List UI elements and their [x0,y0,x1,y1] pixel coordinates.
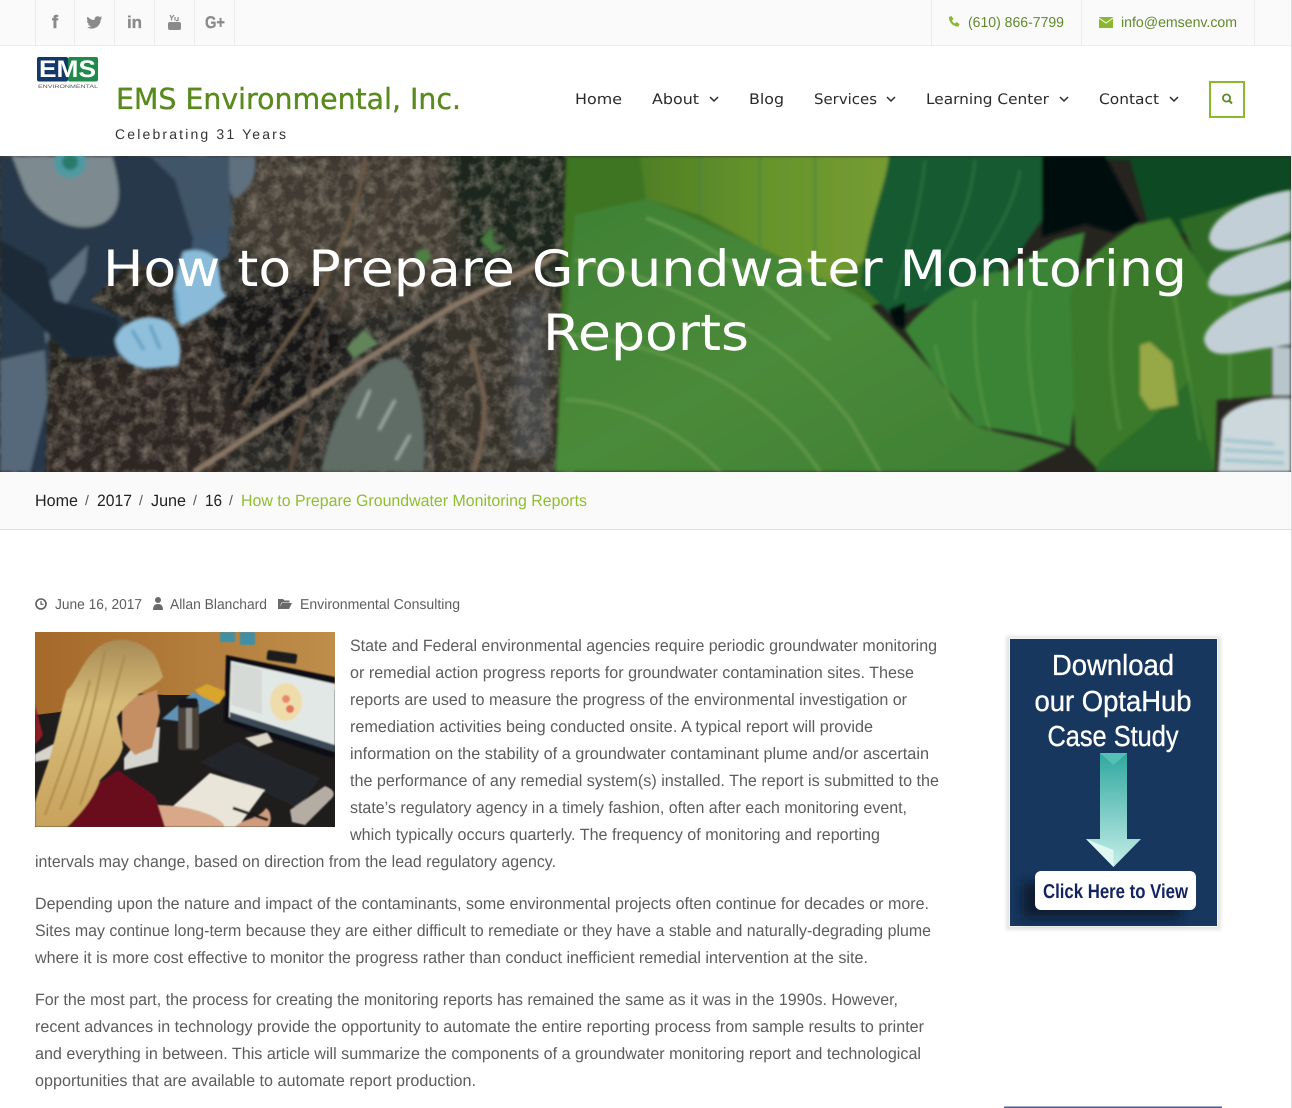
post meta: June 16, 2017 [55,597,142,613]
navigation: About [652,92,699,108]
coffee tumbler [178,702,199,750]
navigation: Services [814,92,877,108]
breadcrumb bar: 2017 [97,492,132,510]
icon: author [153,597,163,610]
article paragraph 2: Sites may continue long-term because they are either difficult to remediate or they have a stable and naturally-degrading plume [35,922,931,940]
logo: ENVIRONMENTAL [38,84,98,90]
arrow: down to button [1086,753,1141,867]
breadcrumb bar: / [139,492,143,508]
icon: clock [36,599,46,609]
banner heading: Case Study [1048,721,1179,753]
wrist pad and mouse [290,786,334,825]
page title [103,240,1187,362]
hair [35,640,163,827]
breadcrumb bar: / [85,492,89,508]
article paragraph 3 [35,991,925,1090]
open notebook [173,773,265,827]
hands [158,805,224,827]
navigation: Contact [1099,92,1159,108]
breadcrumb bar: Home [35,492,78,510]
header: logo and brand [37,56,461,142]
monitor [224,655,335,758]
notepaper stack [124,727,160,770]
icon: twitter [87,16,102,29]
article paragraph 3: recent advances in technology provide the opportunity to automate the entire reporting process from sample results to printer [35,1018,925,1036]
tagline: Celebrating 31 Years [115,126,286,142]
icon: google plus: G+ [205,13,225,32]
soil speckle texture [0,156,575,472]
icon: folder [278,599,292,609]
hero photo: field technician [0,146,256,472]
article paragraph 1: which typically occurs quarterly. The frequency of monitoring and reporting [349,826,880,844]
hero banner [0,140,1291,480]
banner heading: Download [1052,650,1174,682]
navigation [575,82,1244,117]
post meta [36,597,460,613]
navigation: Home [575,92,622,108]
article paragraph 2: where it is more cost effective to monitor the progress rather than conduct inefficient remedial intervention at the site. [34,949,868,967]
banner heading: our OptaHub [1034,686,1192,718]
photo: woman reviewing plume map at desk [35,632,335,827]
article paragraph 3: For the most part, the process for creating the monitoring reports has remained the same as it was in the 1990s. However, [35,991,898,1009]
logo [37,56,98,90]
article paragraph 2 [34,895,931,967]
keyboard [200,742,320,808]
page title: How to Prepare Groundwater Monitoring [103,240,1187,298]
article paragraph 2: Depending upon the nature and impact of the contaminants, some environmental projects often continue for decades or more. [35,895,929,913]
navigation: Learning Center [926,92,1049,108]
banner heading [1034,650,1192,753]
post meta: Allan Blanchard [170,597,267,613]
button: click here to view [1022,871,1196,918]
article paragraph 1: state’s regulatory agency in a timely fashion, often after each monitoring event, [350,799,907,817]
article paragraph 3: and everything in between. This article will summarize the components of a groundwater monitoring report and technological [35,1045,921,1063]
post meta: Environmental Consulting [300,597,460,613]
breadcrumb bar: / [229,492,233,508]
hero photo: compact fluorescent bulb [1204,190,1291,472]
icon: facebook: f [52,12,59,32]
icon: youtube [168,15,181,30]
site name: EMS Environmental, Inc. [116,82,461,116]
page right edge line [1291,0,1292,1108]
article paragraph 1 [35,637,939,871]
article paragraph 1: State and Federal environmental agencies require periodic groundwater monitoring [350,637,937,655]
icon: phone [949,16,960,27]
button: click here to view: Click Here to View [1043,881,1188,903]
icon: linkedin: in [127,13,142,32]
breadcrumb bar [0,472,1291,530]
hero photo: soil and sticks [0,140,580,480]
search button [1210,82,1244,117]
sidebar: case study banner [1006,636,1221,930]
contact email: info@emsenv.com [1121,15,1237,31]
navigation: Blog [749,92,784,108]
hero photo: green leaves [555,156,1291,472]
red top [68,770,167,827]
article paragraph 1: intervals may change, based on direction from the lead regulatory agency. [35,853,556,871]
article paragraph 1: remediation activities being conducted onsite. A typical report will provide [350,718,873,736]
breadcrumb bar: / [193,492,197,508]
logo: EMS [39,56,96,83]
breadcrumb bar: How to Prepare Groundwater Monitoring Reports [241,492,587,510]
contact phone number: (610) 866-7799 [968,15,1064,31]
sticky notes [220,632,255,645]
article paragraph 1: or remedial action progress reports for groundwater contamination sites. These [350,664,914,682]
sidebar: next widget top edge [1004,1106,1222,1108]
top utility bar [0,0,1292,46]
page title: Reports [543,304,749,362]
article paragraph 1: information on the stability of a groundwater contaminant plume and/or ascertain [350,745,929,763]
breadcrumb bar: 16 [205,492,222,510]
face [122,690,160,755]
article paragraph 1: the performance of any remedial system(s) installed. The report is submitted to the [350,772,939,790]
article paragraph 3: opportunities that are available to automate report production. [35,1072,476,1090]
breadcrumb bar: June [151,492,186,510]
icon: envelope [1099,17,1113,28]
article paragraph 1: reports are used to measure the progress of the environmental investigation or [350,691,908,709]
